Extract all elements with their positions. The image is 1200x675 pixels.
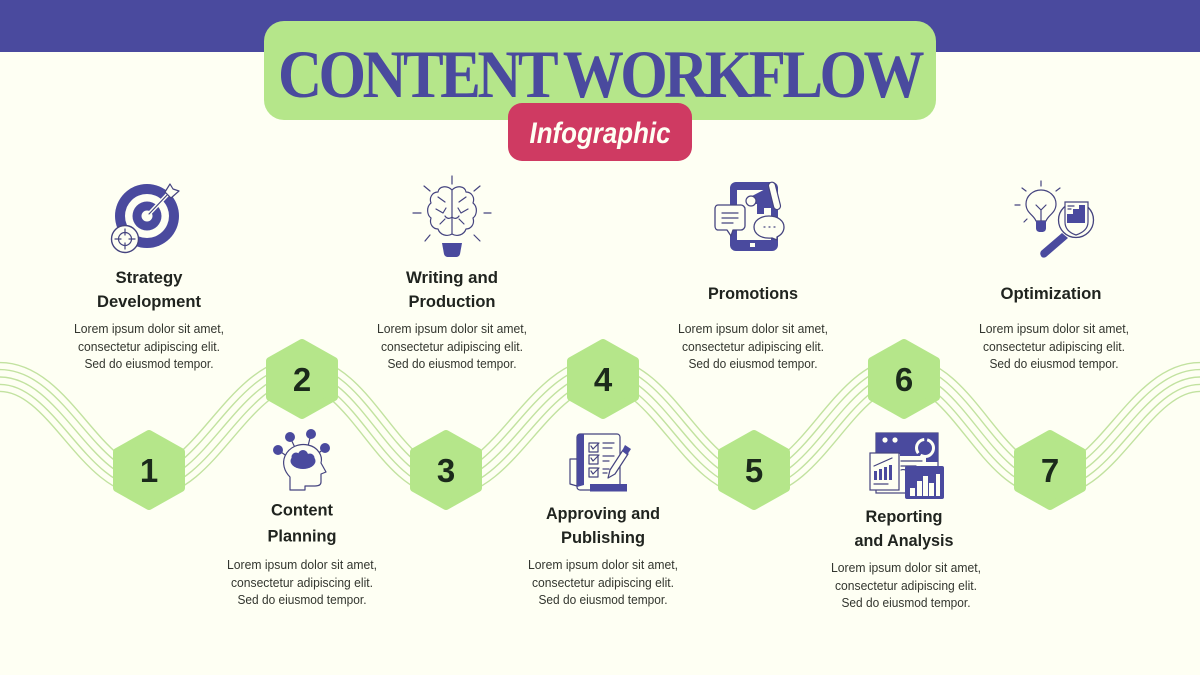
description: consectetur adipiscing elit. [682,340,824,354]
icon: bulb and magnifier [1015,181,1094,258]
icon: charts dashboard [870,433,944,499]
subtitle badge [508,103,692,161]
icon: phone and megaphone [715,181,784,251]
description: Sed do eiusmod tempor. [388,357,516,371]
description: Lorem ipsum dolor sit amet, [227,558,377,572]
icon: checklist [570,434,631,492]
description: consectetur adipiscing elit. [983,340,1125,354]
heading: Writing and [406,268,498,287]
step 3: writing and production [377,176,527,371]
hexagon 3: 3 [437,452,455,489]
hexagon 4: 4 [594,361,613,398]
heading: Planning [268,526,336,546]
hexagon 1: 1 [140,452,158,489]
description: Sed do eiusmod tempor. [538,593,668,607]
heading: Content [271,500,333,520]
step 6: reporting and analysis [831,433,981,610]
hexagon 7: 7 [1041,452,1059,489]
icon: head with ideas [273,429,330,490]
heading: Promotions [708,284,798,303]
heading: Production [408,292,496,311]
description: consectetur adipiscing elit. [78,340,220,354]
description: Sed do eiusmod tempor. [688,357,818,371]
hexagon 6 [872,343,936,415]
description: Sed do eiusmod tempor. [990,357,1118,371]
heading: Development [97,292,201,311]
heading: Approving and [546,504,660,523]
description: Lorem ipsum dolor sit amet, [831,561,981,575]
description: consectetur adipiscing elit. [231,576,373,590]
description: Lorem ipsum dolor sit amet, [528,558,678,572]
hexagon 7 [1018,434,1082,506]
hexagon 5 [722,434,786,506]
step 4: approving and publishing [528,434,678,607]
hexagon 2 [270,343,334,415]
icon: brain bulb [413,176,491,257]
step 1: strategy development [74,184,224,371]
top band [0,0,1200,52]
heading: Reporting [866,507,942,526]
step 7: optimization [979,181,1129,371]
hexagon 5: 5 [745,452,763,489]
title: CONTENT WORKFLOW [278,36,924,112]
description: consectetur adipiscing elit. [532,576,674,590]
hexagon 6: 6 [895,361,913,398]
description: consectetur adipiscing elit. [835,579,977,593]
description: Lorem ipsum dolor sit amet, [74,322,224,336]
description: Sed do eiusmod tempor. [238,593,366,607]
step 5: promotions [678,181,828,371]
hexagon 1 [117,434,181,506]
step 2: content planning [227,429,377,607]
heading: Strategy [116,268,183,287]
wave lines [0,372,1200,482]
hexagon 3 [414,434,478,506]
description: Sed do eiusmod tempor. [84,357,214,371]
description: Lorem ipsum dolor sit amet, [377,322,527,336]
heading: Publishing [561,528,645,547]
description: Sed do eiusmod tempor. [842,596,970,610]
hexagon 4 [571,343,635,415]
icon: target [112,184,179,252]
hexagon 2: 2 [293,361,311,398]
description: Lorem ipsum dolor sit amet, [678,322,828,336]
heading: Optimization [1000,284,1102,303]
heading: and Analysis [854,531,954,550]
subtitle badge: Infographic [530,117,671,150]
description: consectetur adipiscing elit. [381,340,523,354]
description: Lorem ipsum dolor sit amet, [979,322,1129,336]
title banner [264,21,936,120]
